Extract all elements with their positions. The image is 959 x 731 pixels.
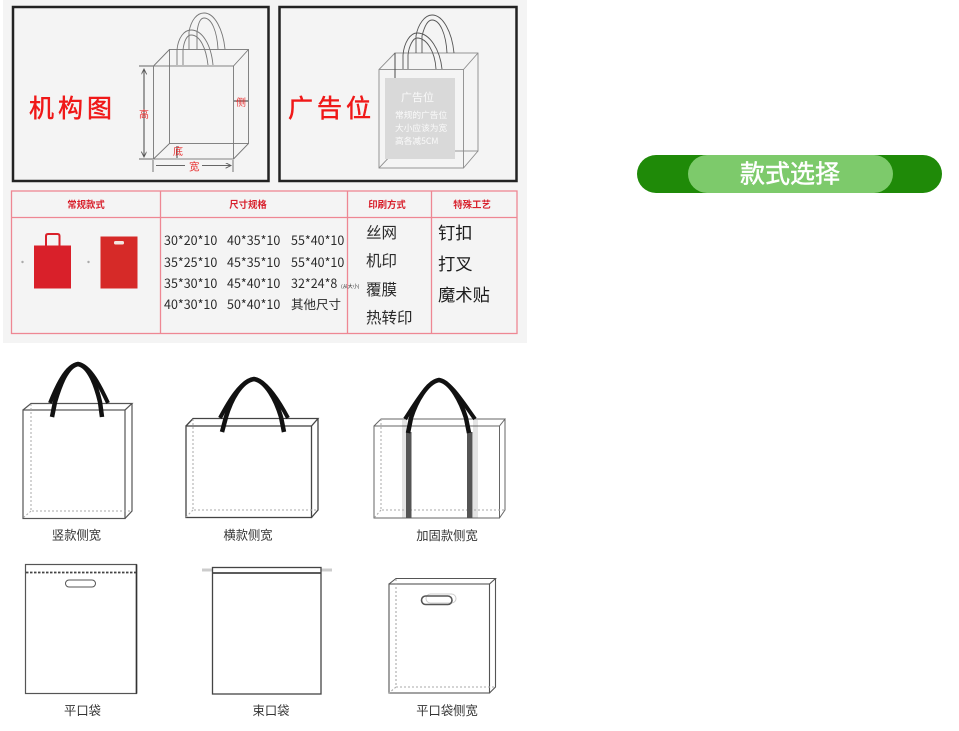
label: width: 宽: [189, 159, 200, 174]
print area text: [395, 89, 447, 147]
heading: structure diagram: 机构图: [29, 89, 116, 125]
bag: horizontal gusset: [186, 379, 318, 544]
button: style selection: [637, 154, 942, 193]
bag: flat with gusset: [389, 578, 496, 719]
size list: 55*40*10: [291, 252, 344, 271]
icon: red die-cut bag: [87, 236, 138, 288]
printing methods: 丝网: [366, 221, 397, 243]
size list: 30*20*10: [164, 230, 217, 249]
special processes: 魔术贴: [438, 281, 490, 306]
size list: 45*40*10: [227, 273, 280, 292]
printing methods: [366, 221, 413, 328]
panel: structure diagram: [13, 7, 268, 181]
size list: (从大小): [341, 283, 360, 290]
icon: red handle bag: [21, 234, 71, 288]
size list: 45*35*10: [227, 252, 280, 271]
print area text: 大小应该为宽: [395, 121, 447, 134]
print area text: 高各减5CM: [395, 134, 438, 147]
caption: 竖款侧宽: [52, 526, 101, 544]
icon: bag outline with dimensions: [139, 13, 248, 172]
bag: reinforced gusset: [374, 380, 505, 544]
panel: advertising position: [280, 7, 516, 181]
print area: [385, 78, 455, 159]
background: specification sheet: [3, 0, 527, 343]
label: side: 侧: [236, 94, 246, 109]
bag: drawstring: [202, 568, 332, 719]
special processes: 打叉: [438, 250, 473, 275]
label: bottom: 底: [173, 143, 183, 158]
special processes: [438, 219, 490, 306]
size list: 35*25*10: [164, 252, 217, 271]
table headers: 印刷方式: [368, 197, 406, 211]
table: specifications: [12, 191, 517, 334]
button label: 款式选择: [740, 154, 840, 190]
handles: [50, 364, 108, 403]
table headers: 特殊工艺: [453, 197, 491, 211]
label: height: 高: [139, 106, 149, 121]
size list: [164, 230, 360, 313]
print area text: 常规的广告位: [395, 108, 447, 121]
size list: 40*35*10: [227, 230, 280, 249]
printing methods: 热转印: [366, 306, 413, 328]
bag: flat: [26, 564, 136, 719]
size list: 40*30*10: [164, 294, 217, 313]
bag: vertical gusset: [23, 364, 132, 544]
size list: 其他尺寸: [291, 294, 341, 313]
table headers: 常规款式: [67, 197, 105, 211]
printing methods: 覆膜: [366, 278, 397, 300]
caption: 横款侧宽: [223, 526, 273, 544]
caption: 平口袋侧宽: [416, 701, 478, 719]
special processes: 钉扣: [438, 219, 473, 244]
size list: 50*40*10: [227, 294, 280, 313]
printing methods: 机印: [366, 249, 397, 271]
icon: bag outline with print area: [379, 15, 478, 168]
heading: advertising position: 广告位: [288, 89, 375, 125]
size list: 32*24*8: [291, 273, 337, 292]
reinforcing straps: [406, 432, 412, 518]
caption: 平口袋: [64, 701, 101, 719]
size list: 35*30*10: [164, 273, 217, 292]
handles: [220, 379, 288, 418]
handles: [405, 380, 475, 419]
table headers: 尺寸规格: [229, 197, 267, 211]
caption: 加固款侧宽: [416, 526, 478, 544]
size list: 55*40*10: [291, 230, 344, 249]
caption: 束口袋: [253, 701, 289, 719]
table headers: [67, 197, 491, 211]
print area text: 广告位: [401, 89, 434, 105]
